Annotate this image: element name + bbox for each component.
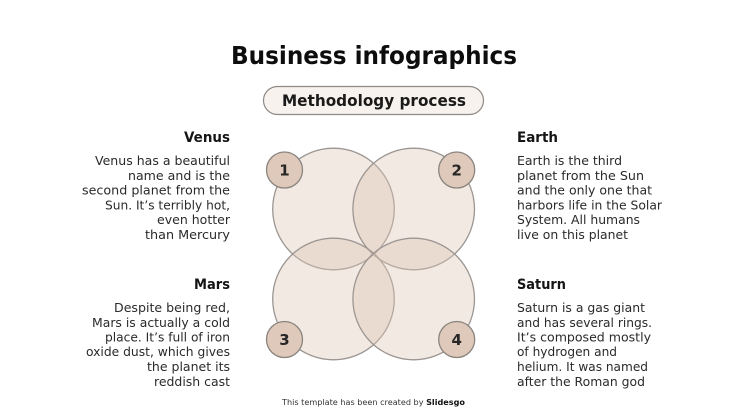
heading: Mars: Mars <box>194 277 230 293</box>
circle 4 <box>353 238 475 360</box>
subtitle pill <box>264 86 484 114</box>
circle 1 <box>273 148 394 270</box>
text: Saturn description: helium. It was named <box>517 360 648 374</box>
text: Saturn description <box>517 301 652 389</box>
text: Venus description: even hotter <box>157 213 230 227</box>
text: Venus description: Sun. It’s terribly hot, <box>105 198 230 212</box>
text: Venus description: second planet from the <box>82 184 230 198</box>
badge 3: 3 <box>279 331 290 349</box>
text: Venus description: than Mercury <box>145 228 230 242</box>
badge 4 <box>439 322 475 358</box>
text: Saturn description: Saturn is a gas giant <box>517 301 645 315</box>
footer credit: This template has been created by Slidesgo <box>281 398 466 407</box>
panel: Venus <box>82 130 230 242</box>
text: Mars description: oxide dust, which gives <box>86 345 230 359</box>
circle 2 <box>353 148 475 270</box>
text: Earth description: Earth is the third <box>517 154 622 168</box>
panel: Saturn <box>517 277 652 389</box>
text: Earth description: System. All humans <box>517 213 640 227</box>
text: Earth description: and the only one that <box>517 184 652 198</box>
heading: Venus: Venus <box>184 130 230 146</box>
text: Venus description <box>82 154 230 242</box>
badge 2 <box>439 152 475 188</box>
text: Mars description: Despite being red, <box>114 301 230 315</box>
badge 1 <box>266 152 302 188</box>
text: Mars description: Mars is actually a cold <box>92 316 230 330</box>
heading: Saturn: Saturn <box>517 277 566 293</box>
panel: Earth <box>517 130 662 242</box>
text: Venus description: name and is the <box>128 169 230 183</box>
text: Earth description <box>517 154 662 242</box>
text: Saturn description: It’s composed mostly <box>517 330 651 344</box>
text: Earth description: live on this planet <box>517 228 628 242</box>
text: Mars description: the planet its <box>147 360 230 374</box>
text: Venus description: Venus has a beautiful <box>95 154 230 168</box>
badge 2: 2 <box>451 162 462 180</box>
badge 1: 1 <box>279 162 290 180</box>
text: Mars description: place. It’s full of iron <box>105 330 230 344</box>
venn diagram <box>266 148 475 360</box>
badge 3 <box>266 322 302 358</box>
text: Saturn description: of hydrogen and <box>517 345 617 359</box>
badge 4: 4 <box>451 331 462 349</box>
text: Saturn description: after the Roman god <box>517 375 645 389</box>
text: Earth description: planet from the Sun <box>517 169 644 183</box>
subtitle pill: Methodology process <box>282 91 466 110</box>
heading: Earth: Earth <box>517 130 558 146</box>
title: Business infographics <box>231 41 517 70</box>
text: Earth description: harbors life in the Solar <box>517 198 662 212</box>
circle 3 <box>273 238 394 360</box>
text: Mars description: reddish cast <box>154 375 230 389</box>
panel: Mars <box>86 277 230 389</box>
text: Mars description <box>86 301 230 389</box>
text: Saturn description: and has several rings. <box>517 316 652 330</box>
